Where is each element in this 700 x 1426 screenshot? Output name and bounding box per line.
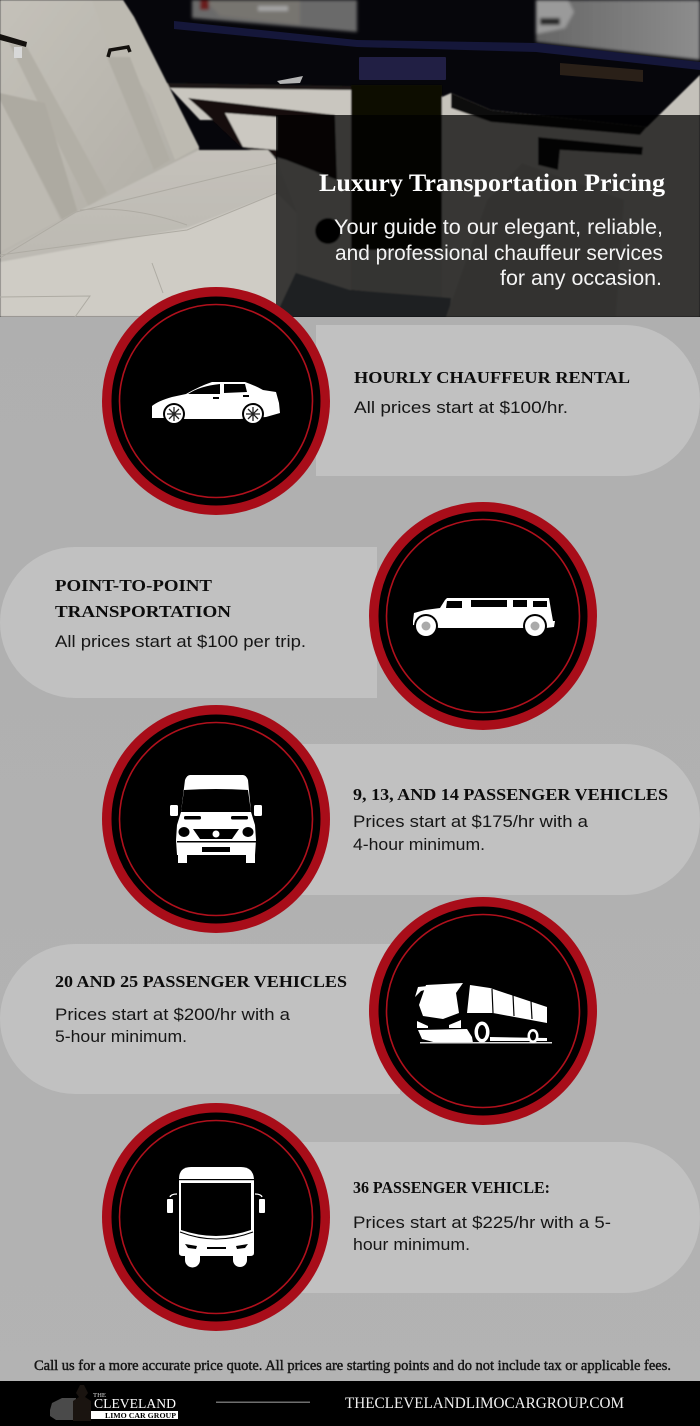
- heading: point-to-point: POINT-TO-POINT: [55, 576, 213, 595]
- icon: sedan: [152, 382, 280, 425]
- heading: point-to-point: TRANSPORTATION: [55, 602, 232, 621]
- text: 36 passenger price: [353, 1213, 611, 1254]
- badge: city bus: [102, 1103, 330, 1331]
- text: 20 and 25 price: [55, 1005, 291, 1046]
- panel: 9, 13, 14 passenger: [300, 744, 700, 895]
- icon: front-view bus: [167, 1167, 265, 1268]
- badge: van: [102, 705, 330, 933]
- badge: coach bus: [369, 897, 597, 1125]
- website url: THECLEVELANDLIMOCARGROUP.COM: [345, 1395, 624, 1412]
- icon: coach bus: [415, 983, 552, 1044]
- text: 20 and 25 price: Prices start at $200/hr with a: [55, 1005, 291, 1024]
- logo: Cleveland Limo Car Group: [50, 1385, 178, 1421]
- text: 36 passenger price: hour minimum.: [353, 1235, 470, 1254]
- icon: passenger van: [170, 775, 262, 863]
- panel: 36 passenger: [300, 1142, 700, 1293]
- heading: point-to-point: [55, 576, 232, 621]
- heading: 20 and 25: 20 AND 25 PASSENGER VEHICLES: [55, 972, 347, 991]
- hero photo: limousine interior: [0, 0, 700, 317]
- text: point-to-point price: All prices start at $100 per trip.: [55, 632, 306, 651]
- title: Luxury Transportation Pricing: [319, 170, 666, 197]
- icon: stretch limo: [413, 598, 555, 638]
- badge: car: [102, 287, 330, 515]
- panel: point-to-point: [0, 547, 377, 698]
- panel: 20 and 25 passenger: [0, 944, 400, 1094]
- panel: hourly chauffeur rental: [316, 325, 700, 476]
- right seat: [446, 308, 450, 317]
- subtitle: and professional chauffeur services: [335, 242, 663, 265]
- footer bar: [0, 1381, 700, 1426]
- text: hourly price: All prices start at $100/hr.: [354, 398, 568, 417]
- disclaimer note: Call us for a more accurate price quote. All prices are starting points and do not include tax or applicable fees.: [34, 1358, 671, 1374]
- rear bench: backrest: [0, 0, 199, 257]
- text: 9, 13, 14 price: [353, 812, 589, 854]
- text: 9, 13, 14 price: 4-hour minimum.: [353, 835, 485, 854]
- logo text: the: THE: [93, 1393, 106, 1399]
- text: 9, 13, 14 price: Prices start at $175/hr with a: [353, 812, 589, 831]
- heading: 9, 13, 14: 9, 13, AND 14 PASSENGER VEHICLES: [353, 785, 668, 804]
- logo icon: car: [50, 1398, 76, 1420]
- subtitle: for any occasion.: [500, 267, 662, 290]
- seat belt hardware: [0, 34, 27, 47]
- rear bench: cushion: [0, 148, 278, 263]
- door panel: [167, 85, 351, 300]
- logo icon: chauffeur: [73, 1385, 91, 1421]
- logo text: limo car group: LIMO CAR GROUP: [105, 1411, 176, 1420]
- badge: limousine: [369, 502, 597, 730]
- text: 20 and 25 price: 5-hour minimum.: [55, 1027, 187, 1046]
- heading: 36 passenger: 36 PASSENGER VEHICLE:: [353, 1178, 550, 1197]
- logo text: cleveland: CLEVELAND: [94, 1397, 176, 1412]
- hero text overlay panel: [276, 115, 700, 317]
- text: 36 passenger price: Prices start at $225/hr with a 5-: [353, 1213, 611, 1232]
- subtitle: Your guide to our elegant, reliable,: [334, 216, 663, 239]
- heading: hourly: HOURLY CHAUFFEUR RENTAL: [354, 368, 630, 387]
- subtitle: [334, 216, 663, 290]
